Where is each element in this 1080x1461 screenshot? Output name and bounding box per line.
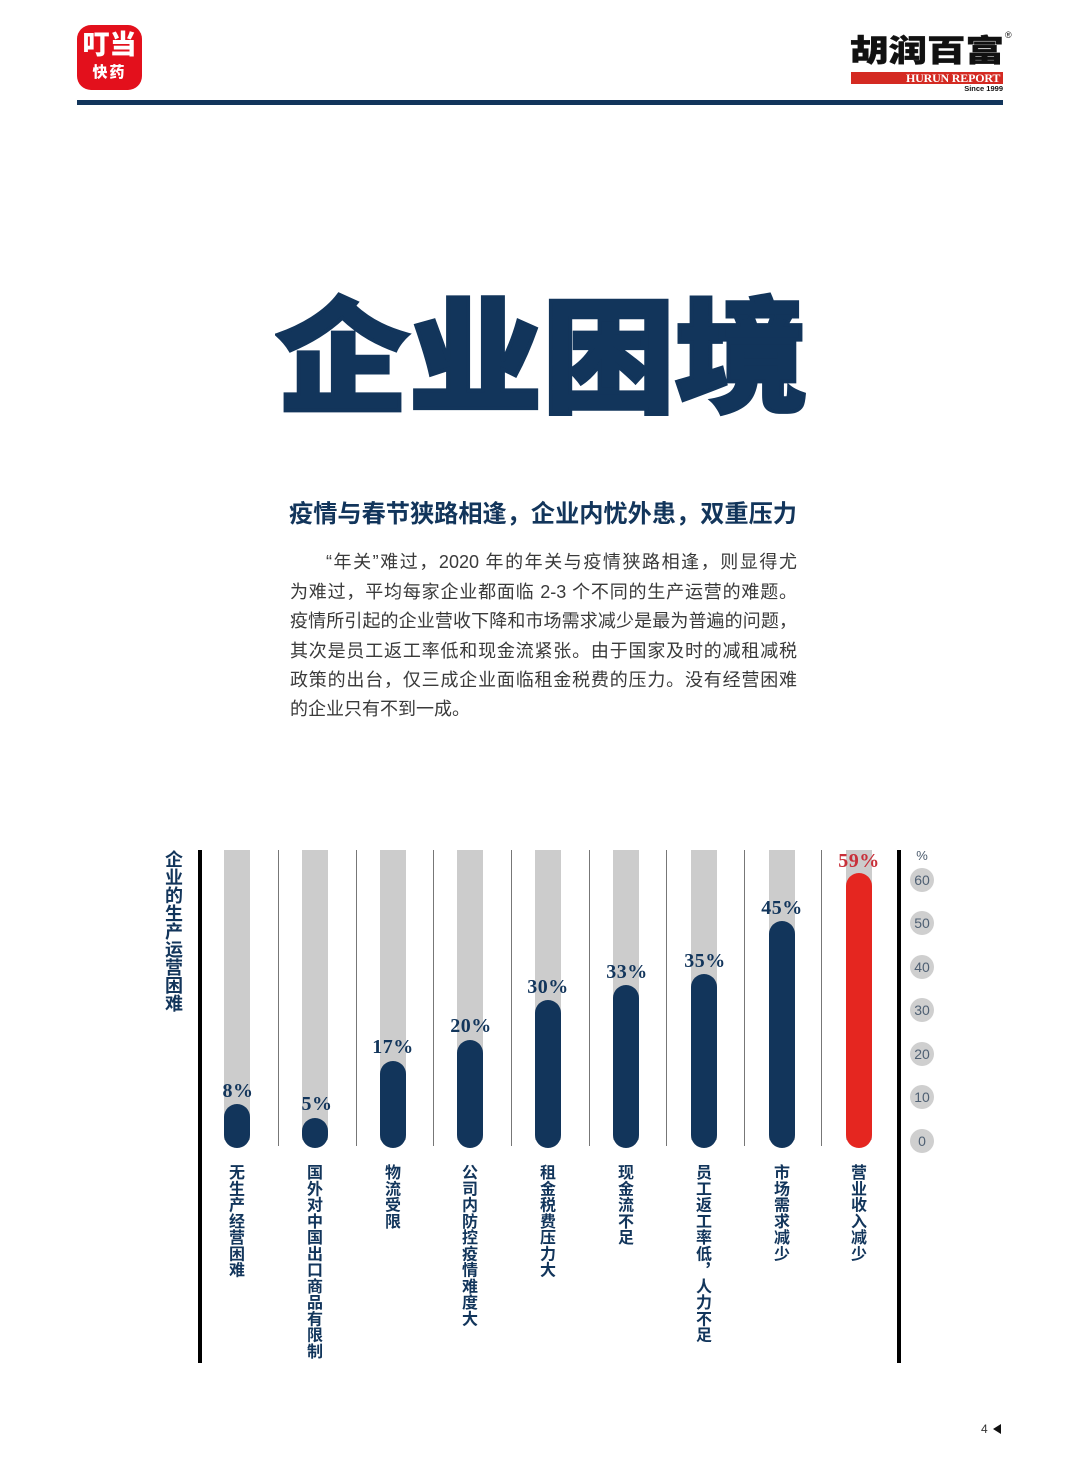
header rule: [77, 100, 1003, 105]
bar: 国外对中国出口商品有限制 5%: 国外对中国出口商品有限制: [304, 1164, 321, 1359]
logo: Dingdang pharmacy: 叮当: [82, 30, 136, 60]
bar: 员工返工率低，人力不足 35%: [684, 850, 726, 1343]
body paragraph: 疫情所引起的企业营收下降和市场需求减少是最为普遍的问题，: [290, 611, 797, 631]
scale: 10: [914, 1089, 930, 1105]
bar: 现金流不足 33%: 33%: [606, 961, 648, 983]
bar: 公司内防控疫情难度大 20%: 公司内防控疫情难度大: [459, 1164, 476, 1326]
body paragraph: 为难过，平均每家企业都面临 2-3 个不同的生产运营的难题。: [290, 582, 797, 602]
logo: Dingdang pharmacy: [77, 25, 142, 90]
bar: 员工返工率低，人力不足 35%: 员工返工率低，人力不足: [693, 1164, 710, 1343]
bar: 市场需求减少 45%: [761, 850, 803, 1262]
logo: Dingdang pharmacy: 快药: [92, 64, 126, 81]
body paragraph: 政策的出台，仅三成企业面临租金税费的压力。没有经营困难: [290, 670, 797, 690]
page number: [981, 1422, 1001, 1436]
bar: 现金流不足 33%: [606, 850, 648, 1245]
logo: Hurun Report: HURUN REPORT: [906, 71, 1000, 85]
bar: 无生产经营困难 8%: 8%: [222, 1080, 254, 1102]
bar: 营业收入减少 59%: [838, 850, 880, 1262]
scale: %: [916, 848, 928, 863]
scale: 30: [914, 1002, 930, 1018]
bar: 租金税费压力大 30%: [527, 850, 569, 1278]
body paragraph: “年关”难过，2020 年的年关与疫情狭路相逢，则显得尤: [326, 552, 797, 572]
logo: Hurun Report: ®: [1005, 30, 1012, 40]
logo: Hurun Report: [850, 30, 1012, 93]
scale: 50: [914, 915, 930, 931]
bar: 国外对中国出口商品有限制 5%: 5%: [302, 1093, 332, 1115]
bar: 无生产经营困难 8%: 无生产经营困难: [226, 1164, 243, 1278]
body paragraph: 的企业只有不到一成。: [290, 699, 470, 719]
bar: 国外对中国出口商品有限制 5%: [302, 850, 332, 1359]
body paragraph: [290, 552, 797, 719]
logo: Hurun Report: 胡润百富: [850, 34, 1004, 69]
bar: 租金税费压力大 30%: 租金税费压力大: [537, 1164, 554, 1278]
bar: 租金税费压力大 30%: 30%: [527, 976, 569, 998]
bar: 物流受限 17%: 物流受限: [382, 1164, 399, 1229]
logo: Hurun Report: Since 1999: [964, 84, 1003, 93]
scale: [910, 848, 934, 1153]
left axis line: [198, 850, 202, 1363]
bar: 现金流不足 33%: 现金流不足: [615, 1164, 632, 1245]
page number: 4: [981, 1422, 988, 1436]
bar: 营业收入减少 59%: 59%: [838, 850, 880, 872]
bar: 员工返工率低，人力不足 35%: 35%: [684, 950, 726, 972]
axis title: 企业的生产运营困难: [163, 850, 183, 1012]
bar: 市场需求减少 45%: 市场需求减少: [771, 1164, 788, 1262]
bar: 公司内防控疫情难度大 20%: 20%: [450, 1015, 492, 1037]
body paragraph: 其次是员工返工率低和现金流紧张。由于国家及时的减租减税: [290, 641, 797, 661]
scale: 20: [914, 1046, 930, 1062]
subheading: 疫情与春节狭路相逢，企业内忧外患，双重压力: [289, 501, 797, 528]
right axis line: [897, 850, 901, 1363]
scale: 40: [914, 959, 930, 975]
bar: 物流受限 17%: [372, 850, 414, 1229]
bar: 市场需求减少 45%: 45%: [761, 897, 803, 919]
bar: 无生产经营困难 8%: [222, 850, 254, 1278]
scale: 0: [918, 1133, 926, 1149]
bar: 营业收入减少 59%: 营业收入减少: [848, 1164, 865, 1262]
bar: 物流受限 17%: 17%: [372, 1036, 414, 1058]
bar: 公司内防控疫情难度大 20%: [450, 850, 492, 1326]
scale: 60: [914, 872, 930, 888]
title: 企业困境: [276, 291, 808, 429]
